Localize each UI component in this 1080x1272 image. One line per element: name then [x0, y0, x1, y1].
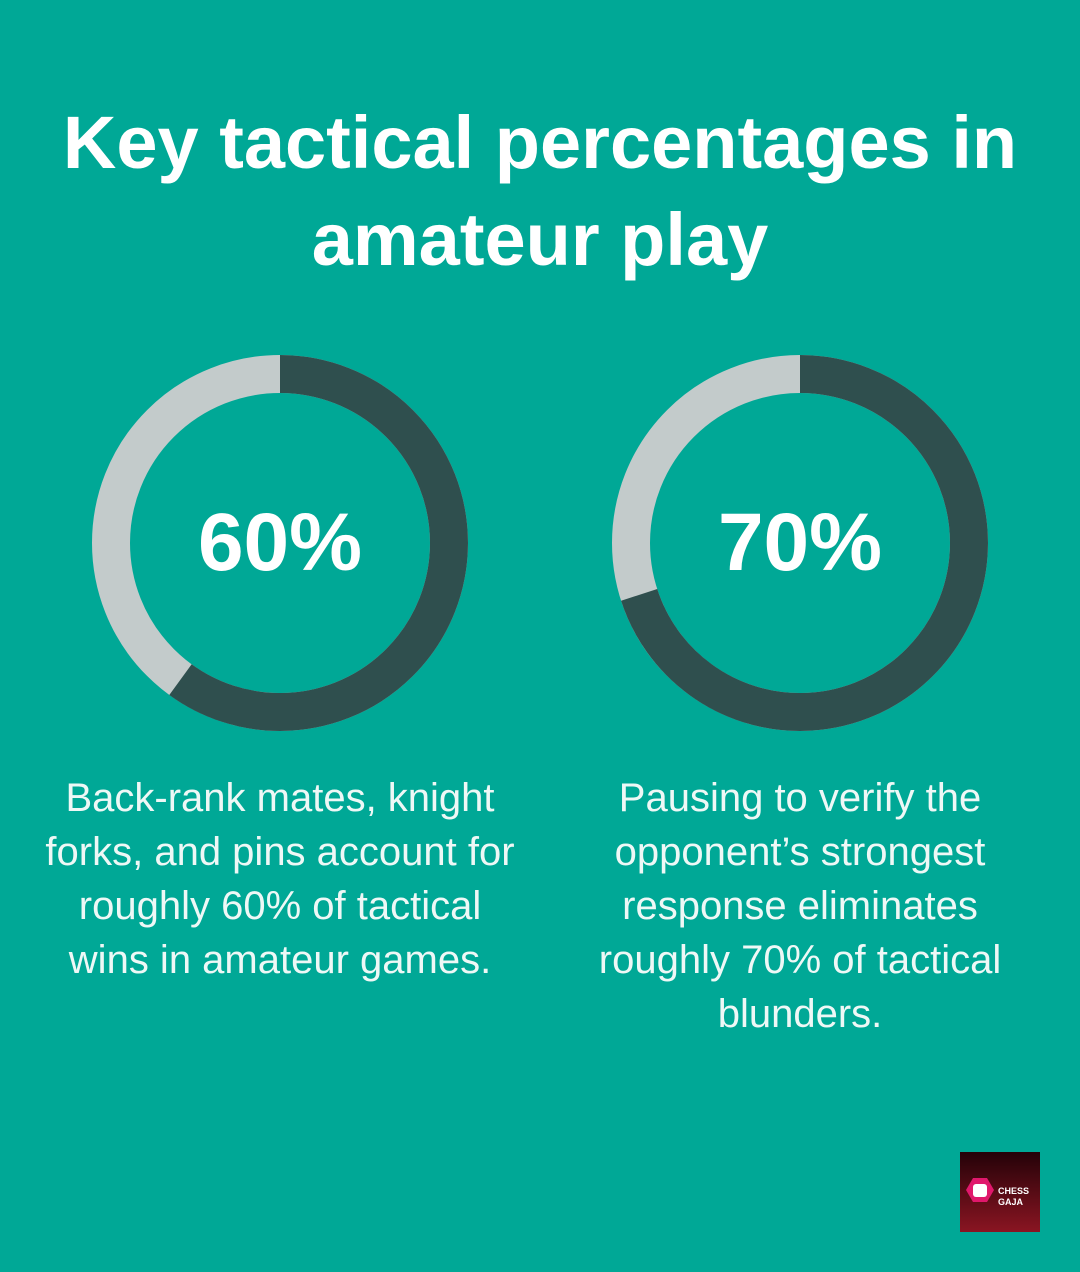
text: 70% description: roughly 70% of tactical [599, 938, 1001, 982]
title: Key tactical percentages in [63, 101, 1017, 184]
text: 70% description: response eliminates [622, 884, 978, 928]
text: 70% description [599, 776, 1001, 1036]
donut chart: 70%: 70% [718, 497, 882, 588]
text: 70% description: blunders. [718, 992, 882, 1036]
text: 60% description [45, 776, 515, 982]
donut chart: 60%: 60% [198, 497, 362, 588]
donut chart: 70% [612, 355, 988, 731]
logo: Chess Gaja: GAJA [998, 1197, 1024, 1207]
title: amateur play [312, 198, 768, 281]
text: 60% description: roughly 60% of tactical [79, 884, 481, 928]
logo: Chess Gaja [960, 1152, 1040, 1232]
text: 60% description: wins in amateur games. [69, 938, 491, 982]
logo: Chess Gaja: CHESS [998, 1186, 1029, 1196]
text: 60% description: forks, and pins account for [45, 830, 515, 874]
title [63, 101, 1017, 281]
text: 60% description: Back-rank mates, knight [65, 776, 495, 820]
text: 70% description: Pausing to verify the [619, 776, 981, 820]
donut chart: 60% [92, 355, 468, 731]
text: 70% description: opponent’s strongest [615, 830, 985, 874]
